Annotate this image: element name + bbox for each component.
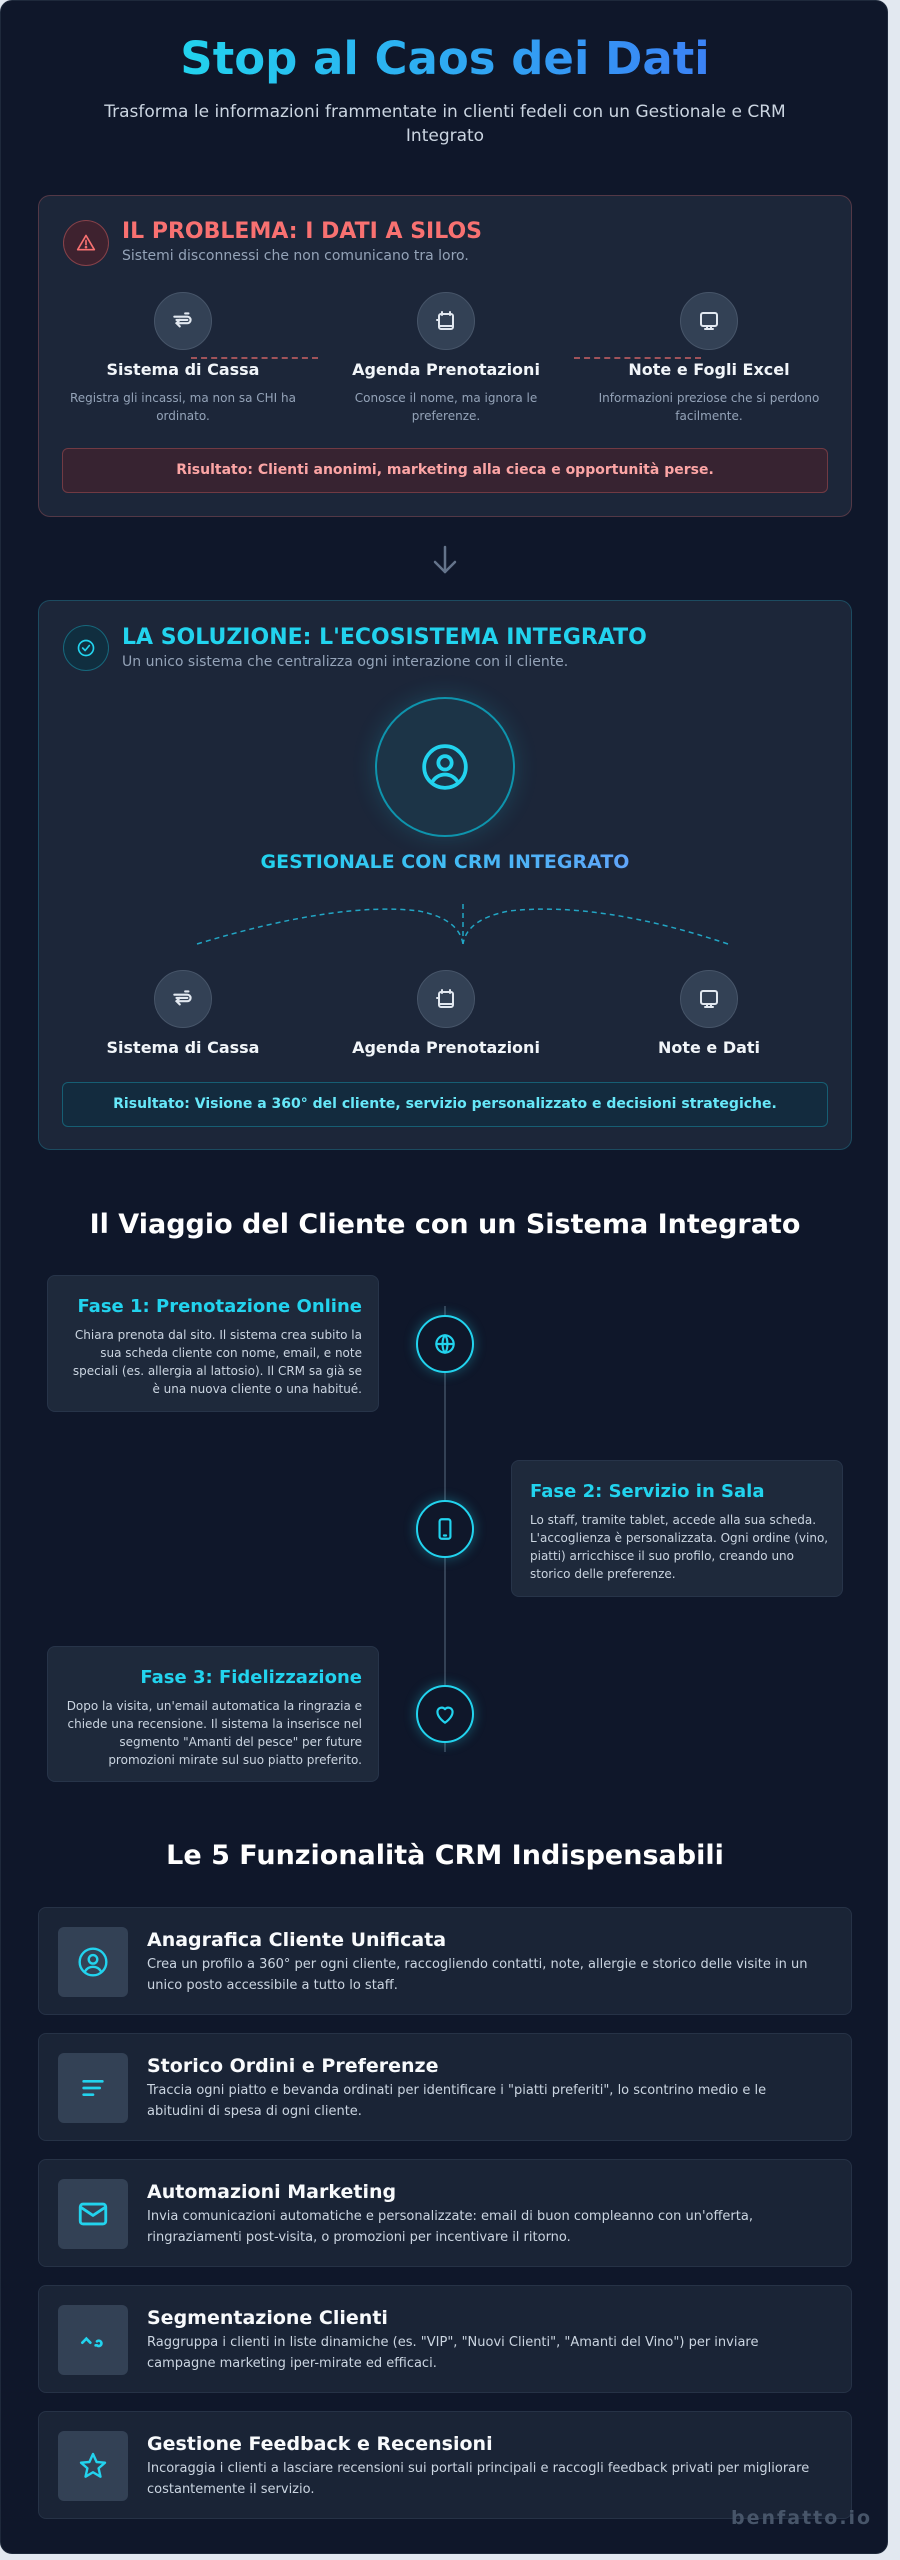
node: cassa: Sistema di Cassa xyxy=(107,1038,259,1057)
node: cassa xyxy=(107,970,259,1057)
card: fase 3 xyxy=(47,1646,379,1782)
callout: solution result: Risultato: Visione a 360° del cliente, servizio personalizzato e decisioni strategiche. xyxy=(113,1096,777,1112)
node: note: Note e Dati xyxy=(658,1038,760,1057)
feature: segmentazione: Segmentazione Clienti xyxy=(147,2307,388,2329)
hub: CRM circle xyxy=(375,697,515,837)
connectors: dashed curves xyxy=(196,904,728,945)
feature: storico xyxy=(38,2033,852,2141)
feature: feedback: Gestione Feedback e Recensioni xyxy=(147,2433,493,2455)
subtitle: Trasforma le informazioni frammentate in clienti fedeli con un Gestionale e CRM Integrato xyxy=(104,102,786,146)
dashed connector right xyxy=(574,357,701,359)
card: fase 1: Fase 1: Prenotazione Online xyxy=(77,1296,362,1317)
timeline line xyxy=(444,1306,446,1752)
icon: heart xyxy=(416,1685,474,1743)
label: note: Note e Fogli Excel xyxy=(628,360,790,379)
callout: solution result xyxy=(62,1082,828,1127)
card: fase 1: Chiara prenota dal sito. Il sistema crea subito la sua scheda cliente con nome, email, e note speciali (es. allergia al lattosio). Il CRM sa già se è una nuova cliente o una habitué. xyxy=(73,1328,362,1396)
card: fase 3: Fase 3: Fidelizzazione xyxy=(140,1667,362,1688)
icon: user xyxy=(58,1927,128,1997)
title: Stop al Caos dei Dati xyxy=(180,32,710,85)
icon: calendar xyxy=(417,292,475,350)
feature: segmentazione xyxy=(38,2285,852,2393)
callout: problem result: Risultato: Clienti anonimi, marketing alla cieca e opportunità perse. xyxy=(176,462,714,478)
desc: note: Informazioni preziose che si perdono facilmente. xyxy=(599,391,819,423)
column: note xyxy=(599,292,819,423)
feature: automazioni: Automazioni Marketing xyxy=(147,2181,396,2203)
dashed connector left xyxy=(191,357,318,359)
feature: storico: Storico Ordini e Preferenze xyxy=(147,2055,438,2077)
column: cassa xyxy=(70,292,296,423)
card: fase 1 xyxy=(47,1275,379,1412)
feature: anagrafica: Anagrafica Cliente Unificata xyxy=(147,1929,446,1951)
callout: problem result xyxy=(62,448,828,493)
node: agenda xyxy=(352,970,540,1057)
feature: feedback xyxy=(38,2411,852,2519)
problem subtitle: Sistemi disconnessi che non comunicano tra loro. xyxy=(122,248,469,264)
node: agenda: Agenda Prenotazioni xyxy=(352,1038,540,1057)
icon: phone xyxy=(416,1500,474,1558)
icon: warning xyxy=(63,220,109,266)
icon: check xyxy=(63,625,109,671)
card: fase 2: Lo staff, tramite tablet, accede alla sua scheda. L'accoglienza è personalizzata. Ogni ordine (vino, piatti) arricchisce il suo profilo, creando uno storico delle preferenze. xyxy=(530,1513,828,1581)
node: note xyxy=(658,970,760,1057)
feature: anagrafica xyxy=(38,1907,852,2015)
card: fase 3: Dopo la visita, un'email automatica la ringrazia e chiede una recensione. Il sistema la inserisce nel segmento "Amanti del pesce" per future promozioni mirate sul suo piatto preferito. xyxy=(67,1699,362,1767)
icon: mail xyxy=(58,2179,128,2249)
card: fase 2: Fase 2: Servizio in Sala xyxy=(530,1481,764,1502)
panel: solution xyxy=(38,600,852,1150)
heading: journey: Il Viaggio del Cliente con un Sistema Integrato xyxy=(90,1209,800,1240)
label: cassa: Sistema di Cassa xyxy=(107,360,259,379)
desc: agenda: Conosce il nome, ma ignora le preferenze. xyxy=(355,391,537,423)
feature: automazioni: Invia comunicazioni automatiche e personalizzate: email di buon compleanno con un'offerta, ringraziamenti post-visita, o promozioni per incentivare il ritorno. xyxy=(147,2209,753,2245)
heading: problem: IL PROBLEMA: I DATI A SILOS xyxy=(122,219,482,244)
feature: segmentazione: Raggruppa i clienti in liste dinamiche (es. "VIP", "Nuovi Clienti", "Amanti del Vino") per inviare campagne marketing iper-mirate ed efficaci. xyxy=(147,2335,758,2371)
icon: segments xyxy=(58,2305,128,2375)
label: agenda: Agenda Prenotazioni xyxy=(352,360,540,379)
icon: lines xyxy=(58,2053,128,2123)
watermark: benfatto.io xyxy=(731,2507,872,2529)
heading: features: Le 5 Funzionalità CRM Indispensabili xyxy=(166,1840,724,1871)
icon: monitor xyxy=(680,292,738,350)
icon: globe xyxy=(416,1315,474,1373)
card: fase 2 xyxy=(511,1460,843,1597)
icon: cassa xyxy=(154,292,212,350)
feature: automazioni xyxy=(38,2159,852,2267)
arrow: down xyxy=(434,546,456,574)
icon: star xyxy=(58,2431,128,2501)
feature: storico: Traccia ogni piatto e bevanda ordinati per identificare i "piatti preferiti", lo scontrino medio e le abitudini di spesa di ogni cliente. xyxy=(147,2083,766,2119)
panel: problem xyxy=(38,195,852,517)
solution subtitle: Un unico sistema che centralizza ogni interazione con il cliente. xyxy=(122,654,568,670)
column: agenda xyxy=(352,292,540,423)
desc: cassa: Registra gli incassi, ma non sa CHI ha ordinato. xyxy=(70,391,296,423)
hub label: GESTIONALE CON CRM INTEGRATO xyxy=(261,851,629,873)
feature: anagrafica: Crea un profilo a 360° per ogni cliente, raccogliendo contatti, note, allergie e storico delle visite in un unico posto accessibile a tutto lo staff. xyxy=(147,1957,808,1993)
feature: feedback: Incoraggia i clienti a lasciare recensioni sui portali principali e raccogli feedback privati per migliorare costantemente il servizio. xyxy=(147,2461,809,2497)
heading: solution: LA SOLUZIONE: L'ECOSISTEMA INTEGRATO xyxy=(122,625,647,650)
